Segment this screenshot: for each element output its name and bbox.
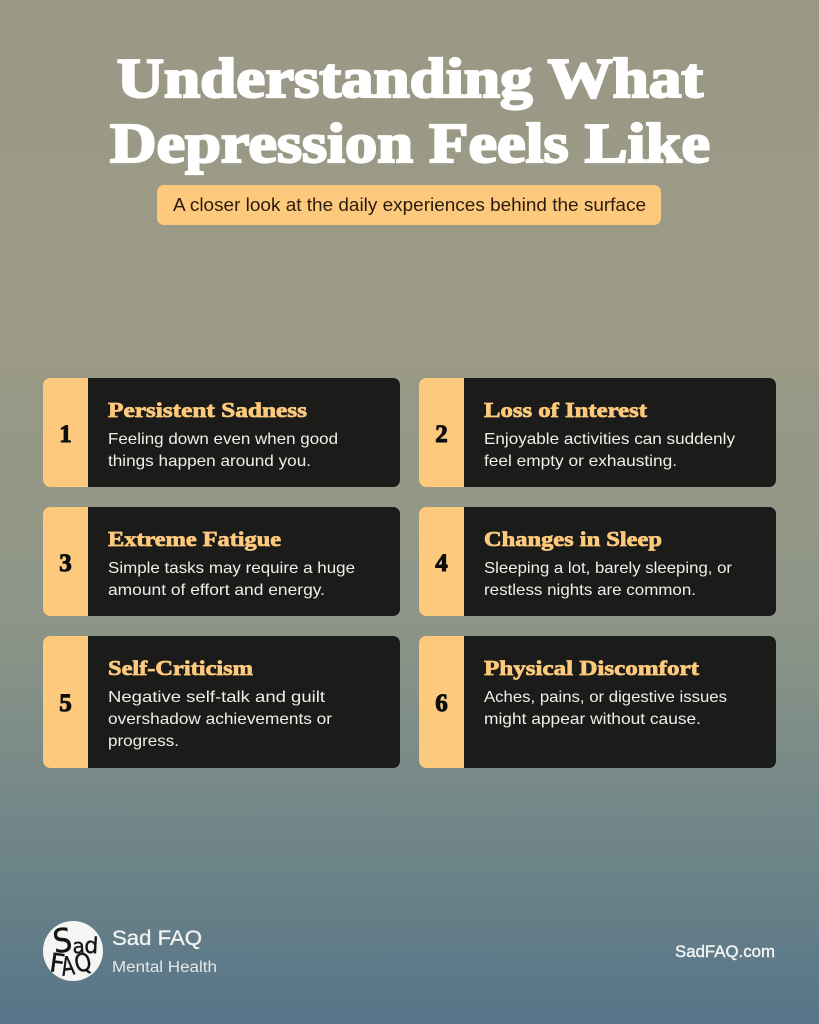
card 4: changes in sleep: Changes in Sleep xyxy=(484,527,662,551)
card 4: changes in sleep: 4 xyxy=(435,550,448,577)
card 1: persistent sadness: things happen around you. xyxy=(108,453,311,470)
title: Depression Feels Like xyxy=(110,113,710,175)
card 2: loss of interest xyxy=(419,378,776,487)
card 1: persistent sadness: Persistent Sadness xyxy=(108,398,307,422)
website: SadFAQ.com xyxy=(675,943,775,961)
card 4: changes in sleep xyxy=(419,507,776,616)
card 2: loss of interest: feel empty or exhausting. xyxy=(484,453,677,470)
card 2: loss of interest: Enjoyable activities can suddenly xyxy=(484,431,735,448)
card 5: self-criticism: 5 xyxy=(59,690,72,717)
card 6: physical discomfort: might appear without cause. xyxy=(484,711,701,728)
brand name: Sad FAQ xyxy=(112,927,202,950)
logo: Sad FAQ badge: A xyxy=(59,952,77,983)
title xyxy=(110,48,710,175)
card 3: extreme fatigue xyxy=(43,507,400,616)
card 5: self-criticism: overshadow achievements or xyxy=(108,711,333,728)
card 6: physical discomfort: 6 xyxy=(435,690,448,717)
card 6: physical discomfort xyxy=(419,636,776,768)
card 5: self-criticism xyxy=(43,636,400,768)
card 4: changes in sleep: restless nights are common. xyxy=(484,582,696,599)
title: Understanding What xyxy=(117,48,703,110)
card 5: self-criticism: Negative self-talk and guilt xyxy=(108,689,326,706)
logo: Sad FAQ badge: S xyxy=(51,922,75,962)
subtitle pill: A closer look at the daily experiences behind the surface xyxy=(173,195,646,215)
card 1: persistent sadness: 1 xyxy=(59,421,72,448)
card 3: extreme fatigue: 3 xyxy=(59,550,72,577)
card 2: loss of interest: Loss of Interest xyxy=(484,398,647,422)
card 3: extreme fatigue: amount of effort and energy. xyxy=(108,582,325,599)
card 6: physical discomfort: Physical Discomfort xyxy=(484,656,699,680)
logo: Sad FAQ badge: F xyxy=(48,948,67,980)
card 5: self-criticism: Self-Criticism xyxy=(108,656,254,680)
card 5: self-criticism: progress. xyxy=(108,733,179,750)
card 1: persistent sadness: Feeling down even when good xyxy=(108,431,338,448)
card 2: loss of interest: 2 xyxy=(435,421,448,448)
card 6: physical discomfort: Aches, pains, or digestive issues xyxy=(484,689,727,706)
card 1: persistent sadness xyxy=(43,378,400,487)
logo: Sad FAQ badge xyxy=(43,921,103,983)
subtitle pill xyxy=(157,185,661,225)
logo: Sad FAQ badge: d xyxy=(84,934,99,959)
logo: Sad FAQ badge: a xyxy=(72,934,85,958)
card 3: extreme fatigue: Simple tasks may require a huge xyxy=(108,560,355,577)
logo: Sad FAQ badge: Q xyxy=(71,947,95,979)
card 3: extreme fatigue: Extreme Fatigue xyxy=(108,527,281,551)
brand tagline: Mental Health xyxy=(112,959,217,976)
card 4: changes in sleep: Sleeping a lot, barely sleeping, or xyxy=(484,560,733,577)
